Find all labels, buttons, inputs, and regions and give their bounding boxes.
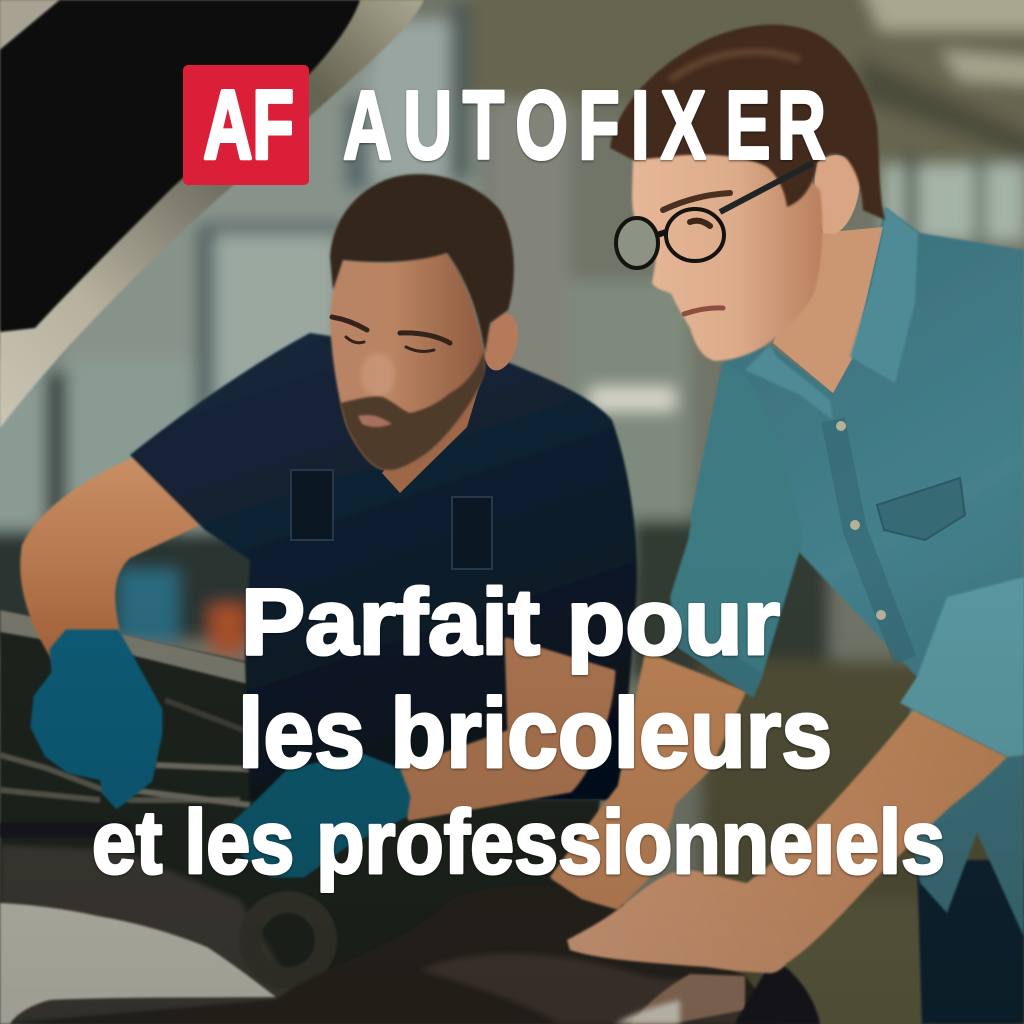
hood underside <box>0 0 360 332</box>
shirt pocket <box>877 478 965 540</box>
engine parts <box>0 700 326 978</box>
top-left hood corner <box>0 0 60 50</box>
brand name: X <box>661 70 706 179</box>
logo badge <box>183 65 309 185</box>
engine bay dark mass <box>0 610 820 1024</box>
logo badge: AF <box>203 70 294 179</box>
brand name: O <box>515 70 568 179</box>
mechanic eyes and brows <box>332 317 450 351</box>
headline line 2: les bricoleurs <box>238 678 832 788</box>
white car fender <box>0 903 276 1024</box>
customer neck <box>773 227 883 393</box>
customer navy trousers <box>917 860 1024 1024</box>
shirt placket and buttons <box>833 420 905 660</box>
brand name: F <box>578 70 620 179</box>
car engine bay <box>0 610 820 1024</box>
mechanic lips <box>358 415 392 427</box>
mechanic beard <box>340 350 485 470</box>
mechanic left glove <box>33 632 160 806</box>
radiator edge <box>0 610 248 684</box>
customer right sleeve <box>900 577 1024 757</box>
brand name: T <box>463 70 504 179</box>
brand name: I <box>631 70 650 179</box>
customer sleeve hem <box>678 625 763 697</box>
mechanic hair <box>330 174 514 353</box>
brand name: E <box>725 70 770 179</box>
dark car hood panel <box>20 886 780 1024</box>
mechanic left arm <box>20 455 200 660</box>
customer hair <box>610 25 885 220</box>
shirt collar <box>745 207 918 420</box>
customer brows, eyes, mouth <box>663 193 730 314</box>
customer right forearm <box>567 710 1007 973</box>
lower bumper body <box>0 845 300 1024</box>
skin reflection <box>630 974 745 1024</box>
bright hood lip <box>615 1000 680 1024</box>
apron straps <box>291 470 492 569</box>
headline line 1: Parfait pour <box>241 569 780 674</box>
brand logo <box>183 65 826 185</box>
hood rim <box>0 0 424 428</box>
customer left sleeve <box>670 363 803 697</box>
customer face <box>632 135 822 361</box>
customer denim shirt <box>690 207 1024 937</box>
mechanic neck <box>382 367 485 493</box>
mechanic <box>20 174 637 875</box>
mechanic ear <box>478 310 524 374</box>
brand name: R <box>777 70 826 179</box>
mechanic right glove <box>235 755 408 875</box>
mechanic right forearm <box>396 640 613 818</box>
hood reflection <box>420 954 745 1024</box>
customer in denim shirt <box>553 25 1024 1024</box>
open car hood <box>0 0 424 428</box>
customer ear <box>815 155 860 234</box>
customer left forearm <box>553 655 743 907</box>
mechanic navy shirt <box>130 333 637 800</box>
black wheel arch <box>735 958 820 1024</box>
mechanic face <box>330 253 485 470</box>
customer hair highlight <box>670 52 800 80</box>
brand name: A <box>343 70 392 179</box>
brand name: U <box>403 70 452 179</box>
text backdrop shade <box>0 560 1024 1024</box>
headline <box>92 569 945 893</box>
mechanic nose highlight <box>361 353 395 397</box>
customer glasses <box>616 163 813 268</box>
